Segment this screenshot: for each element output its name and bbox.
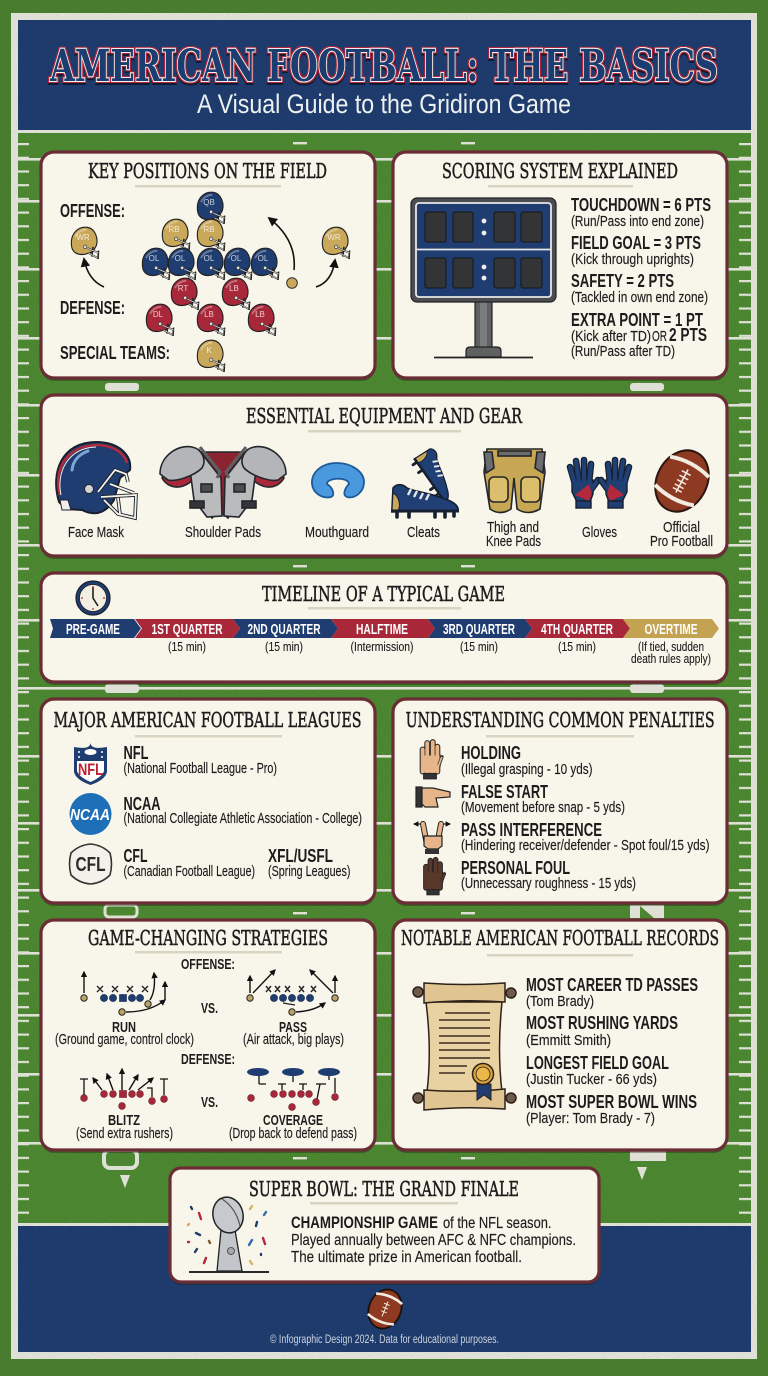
penalties text <box>461 743 710 892</box>
icon: wide receiver helmets <box>71 227 350 259</box>
records text <box>526 975 698 1127</box>
icon: NCAA logo <box>70 793 112 835</box>
scoring text: (Tackled in own end zone) <box>571 290 708 306</box>
equipment labels: Mouthguard <box>305 524 369 541</box>
records text: MOST CAREER TD PASSES <box>526 975 698 995</box>
footer note: © Infographic Design 2024. Data for educational purposes. <box>270 1334 499 1346</box>
heading: super bowl: SUPER BOWL: THE GRAND FINALE <box>249 1177 519 1201</box>
diagram: run play <box>81 972 165 1015</box>
icon: offensive line helmets <box>142 248 279 280</box>
icon: defense helmets: DL <box>153 310 164 319</box>
timeline chevrons: 1ST QUARTER <box>152 622 223 638</box>
icon: football <box>645 441 719 521</box>
records text: (Emmitt Smith) <box>526 1033 611 1049</box>
icon: scoreboard <box>411 198 556 358</box>
penalties text: HOLDING <box>461 743 521 763</box>
defense subheading: DEFENSE: <box>181 1051 235 1068</box>
icon: offensive line helmets: OL <box>204 254 215 263</box>
icon: shoulder pads <box>160 447 286 518</box>
super bowl text: Played annually between AFC & NFC champions. <box>291 1232 576 1249</box>
icon: defense helmets: LB <box>204 310 214 319</box>
records text: (Tom Brady) <box>526 994 594 1010</box>
league text: (National Collegiate Athletic Association - College) <box>124 811 362 827</box>
run label: RUN <box>112 1019 136 1036</box>
icon: special teams helmet: K <box>206 346 212 355</box>
league text: (Spring Leagues) <box>268 864 350 880</box>
scoring text: 2 PTS <box>669 325 707 345</box>
penalties text: FALSE START <box>461 782 548 802</box>
icon: scroll <box>413 983 516 1110</box>
timeline chevrons: 4TH QUARTER <box>541 622 613 638</box>
offense subheading: OFFENSE: <box>181 956 235 973</box>
run label <box>55 1019 194 1048</box>
penalties text: (Unnecessary roughness - 15 yds) <box>461 876 636 892</box>
icon: pass interference hand <box>414 824 450 854</box>
coverage label: COVERAGE <box>263 1112 323 1129</box>
panel: equipment <box>41 395 727 559</box>
equipment labels <box>68 519 713 550</box>
league text: (Canadian Football League) <box>124 864 255 880</box>
heading: key positions: KEY POSITIONS ON THE FIELD <box>88 159 327 183</box>
scoring text: (Kick after TD) <box>571 329 651 345</box>
icon: wide receiver helmets: WR <box>76 233 90 242</box>
timeline durations: (If tied, sudden <box>638 639 704 654</box>
equipment labels: Shoulder Pads <box>185 524 261 541</box>
diagram: pass play <box>247 970 338 1015</box>
penalties text: (Movement before snap - 5 yds) <box>461 800 625 816</box>
icon: running back helmets: RB <box>168 225 180 234</box>
equipment labels: Face Mask <box>68 524 124 541</box>
icon: trophy with confetti <box>188 1194 269 1272</box>
icon: footer football <box>363 1284 407 1334</box>
super bowl text: of the NFL season. <box>443 1215 552 1232</box>
equipment labels: Thigh and <box>487 519 539 536</box>
defense label: DEFENSE: <box>60 298 125 318</box>
icon: cleats <box>391 446 463 517</box>
heading: timeline: TIMELINE OF A TYPICAL GAME <box>262 582 505 606</box>
heading: leagues: MAJOR AMERICAN FOOTBALL LEAGUES <box>54 708 362 732</box>
offense label: OFFENSE: <box>60 201 125 221</box>
records text: MOST RUSHING YARDS <box>526 1013 678 1033</box>
timeline durations: death rules apply) <box>631 651 711 666</box>
heading: equipment: ESSENTIAL EQUIPMENT AND GEAR <box>246 404 522 428</box>
icon: special teams helmet <box>197 340 225 372</box>
icon: defense helmets: LB <box>255 310 265 319</box>
panel: super bowl <box>170 1168 599 1285</box>
penalties text: PASS INTERFERENCE <box>461 820 602 840</box>
icon: helmet <box>56 442 136 518</box>
icon: personal foul hand <box>424 860 444 895</box>
versus: blitz vs coverage: VS. <box>201 1094 218 1111</box>
icon: offensive line helmets: OL <box>149 254 160 263</box>
run label: (Ground game, control clock) <box>55 1032 194 1048</box>
blitz label: BLITZ <box>108 1112 140 1129</box>
blitz label: (Send extra rushers) <box>76 1126 173 1142</box>
league text <box>124 743 362 880</box>
timeline durations: (15 min) <box>558 639 596 654</box>
scoring text: FIELD GOAL = 3 PTS <box>571 233 701 253</box>
scoring text: SAFETY = 2 PTS <box>571 271 674 291</box>
league text: XFL/USFL <box>268 846 333 866</box>
bottom end zone <box>18 1226 751 1352</box>
panel: key positions <box>41 152 375 381</box>
scoring text: TOUCHDOWN = 6 PTS <box>571 195 711 215</box>
timeline chevrons: 2ND QUARTER <box>248 622 321 638</box>
equipment labels: Cleats <box>407 524 440 541</box>
subtitle: A Visual Guide to the Gridiron Game <box>197 89 571 119</box>
coverage label <box>229 1112 357 1142</box>
special teams label: SPECIAL TEAMS: <box>60 343 170 363</box>
timeline durations: (15 min) <box>168 639 206 654</box>
timeline chevrons: HALFTIME <box>356 622 408 638</box>
timeline durations: (15 min) <box>265 639 303 654</box>
icon: defense helmets <box>146 278 276 336</box>
pass label: (Air attack, big plays) <box>243 1032 344 1048</box>
equipment labels: Pro Football <box>650 533 713 550</box>
diagram: coverage <box>247 1068 340 1110</box>
panel: records <box>393 920 727 1153</box>
league text: (National Football League - Pro) <box>124 761 277 777</box>
icon: thigh and knee pads <box>484 449 545 512</box>
records text: (Justin Tucker - 66 yds) <box>526 1072 657 1088</box>
icon: mouthguard <box>312 463 364 497</box>
equipment labels: Knee Pads <box>486 533 541 550</box>
pass label: PASS <box>279 1019 307 1036</box>
icon: running back helmets: RB <box>203 225 215 234</box>
icon: NCAA logo: NCAA <box>70 807 110 824</box>
icon: wide receiver helmets: WR <box>327 233 341 242</box>
icon: NFL shield <box>74 743 107 785</box>
header banner <box>18 20 751 130</box>
scoring text: OR <box>652 329 667 345</box>
records text: (Player: Tom Brady - 7) <box>526 1111 655 1127</box>
icon: offensive line helmets: OL <box>175 254 186 263</box>
icon: offensive line helmets: OL <box>231 254 242 263</box>
icon: defense helmets: RT <box>178 284 188 293</box>
equipment labels: Gloves <box>582 524 617 541</box>
records text: MOST SUPER BOWL WINS <box>526 1092 697 1112</box>
scoring text: (Kick through uprights) <box>571 252 694 268</box>
timeline chevrons <box>50 619 719 638</box>
icon: quarterback helmet: QB <box>203 198 215 207</box>
timeline durations: (Intermission) <box>350 639 414 654</box>
icon: running back helmets <box>162 219 225 251</box>
super bowl text: The ultimate prize in American football. <box>291 1249 522 1266</box>
icon: quarterback helmet <box>197 192 225 224</box>
icon: ball marker <box>287 278 297 288</box>
league text: NFL <box>124 743 148 763</box>
icon: false start pointing hand <box>416 787 450 807</box>
scoring text <box>571 195 711 360</box>
scoring text: EXTRA POINT = 1 PT <box>571 310 703 330</box>
coverage label: (Drop back to defend pass) <box>229 1126 357 1142</box>
icon: CFL logo: CFL <box>76 854 106 876</box>
versus: run vs pass: VS. <box>201 1000 218 1017</box>
blitz label <box>76 1112 173 1142</box>
panel: penalties <box>393 699 727 906</box>
timeline durations <box>168 639 711 666</box>
panel: timeline <box>41 573 727 685</box>
scoring text: (Run/Pass into end zone) <box>571 214 704 230</box>
icon: offensive line helmets: OL <box>258 254 269 263</box>
scoring text: (Run/Pass after TD) <box>571 344 675 360</box>
timeline chevrons: PRE-GAME <box>66 622 120 638</box>
icon: clock <box>76 581 110 615</box>
penalties text: PERSONAL FOUL <box>461 858 570 878</box>
timeline chevrons: 3RD QUARTER <box>443 622 515 638</box>
penalties text: (Illegal grasping - 10 yds) <box>461 762 592 778</box>
timeline chevrons: OVERTIME <box>644 622 698 638</box>
penalties text: (Hindering receiver/defender - Spot foul/15 yds) <box>461 838 710 854</box>
super bowl text: CHAMPIONSHIP GAME <box>291 1213 438 1232</box>
arrows: player motion <box>84 218 335 287</box>
icon: NFL shield: NFL <box>78 760 103 779</box>
equipment labels: Official <box>663 519 700 536</box>
league text: CFL <box>124 846 148 866</box>
panel: strategies <box>41 920 375 1153</box>
timeline durations: (15 min) <box>460 639 498 654</box>
heading: strategies: GAME-CHANGING STRATEGIES <box>88 926 328 950</box>
icon: CFL logo <box>70 844 112 884</box>
diagram: blitz <box>80 1069 168 1109</box>
league text: NCAA <box>124 794 160 814</box>
icon: defense helmets: LB <box>229 284 239 293</box>
records text: LONGEST FIELD GOAL <box>526 1053 669 1073</box>
icon: gloves <box>570 460 629 508</box>
super bowl text <box>291 1213 576 1266</box>
icon: holding hand <box>421 742 442 779</box>
panel: scoring <box>393 152 727 381</box>
panel: leagues <box>41 699 375 906</box>
pass label <box>243 1019 344 1048</box>
